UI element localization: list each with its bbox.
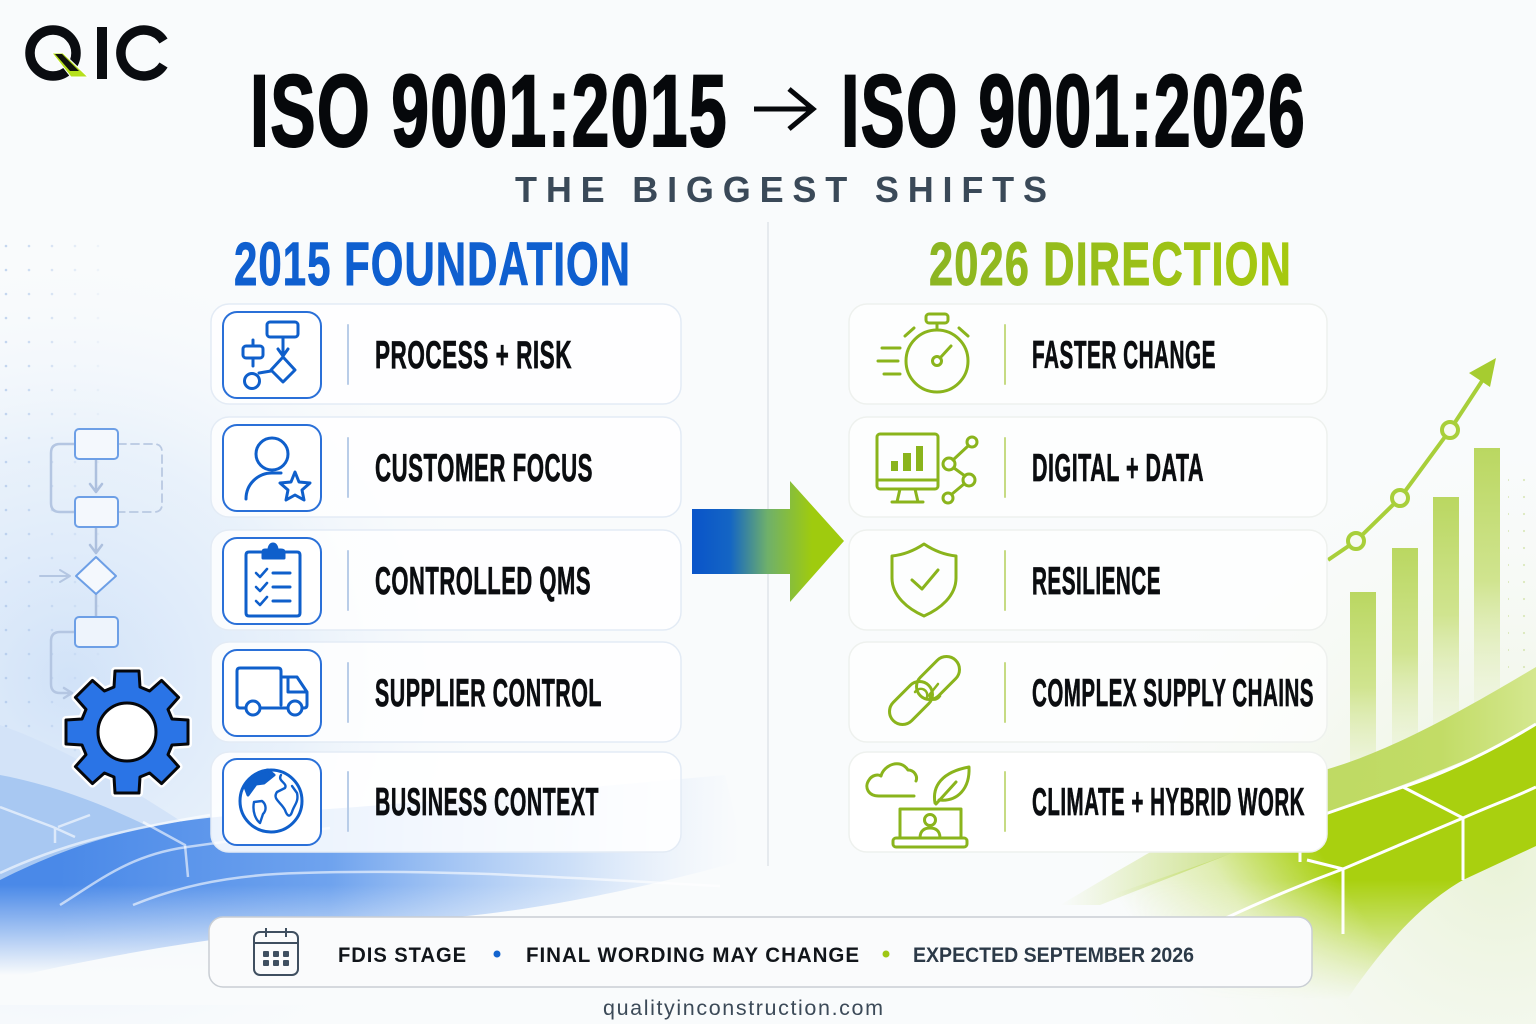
card: process + risk: PROCESS + RISK <box>375 334 572 377</box>
footer status bar: FDIS STAGE <box>338 943 467 967</box>
card: digital + data: DIGITAL + DATA <box>1032 447 1204 490</box>
footer status bar: FINAL WORDING MAY CHANGE <box>526 943 860 967</box>
card: resilience <box>849 530 1327 630</box>
process flowchart <box>40 429 162 698</box>
card: process + risk <box>211 304 681 404</box>
card: controlled qms: CONTROLLED QMS <box>375 560 591 603</box>
background <box>0 244 1536 1024</box>
footer status bar: EXPECTED SEPTEMBER 2026 <box>913 943 1194 967</box>
icon: calendar <box>254 928 298 975</box>
logo: QIC <box>30 27 164 79</box>
footer status bar <box>209 917 1312 987</box>
growth chart <box>1328 358 1500 782</box>
card: controlled qms <box>211 530 681 630</box>
card: climate + hybrid work: CLIMATE + HYBRID WORK <box>1032 781 1305 824</box>
blue wave landscape <box>0 725 760 1005</box>
card: resilience: RESILIENCE <box>1032 560 1161 603</box>
card: business context: BUSINESS CONTEXT <box>375 781 599 824</box>
arrow: 2015 to 2026 <box>692 481 844 602</box>
card: customer focus <box>211 417 681 517</box>
card: complex supply chains <box>849 642 1327 742</box>
center divider <box>767 222 769 866</box>
card: customer focus: CUSTOMER FOCUS <box>375 447 593 490</box>
subtitle: THE BIGGEST SHIFTS <box>515 169 1047 210</box>
green wave landscape <box>1073 667 1536 993</box>
card: business context <box>211 752 681 852</box>
heading: 2015 foundation: 2015 FOUNDATION <box>234 230 631 298</box>
title: ISO 9001:2015 <box>250 54 728 168</box>
panel: 2015 foundation <box>211 304 681 852</box>
card: faster change <box>849 304 1327 404</box>
card: supplier control: SUPPLIER CONTROL <box>375 672 602 715</box>
icon: gear <box>66 671 188 793</box>
card: digital + data <box>849 417 1327 517</box>
panel: 2026 direction <box>849 304 1327 852</box>
title <box>250 54 1306 168</box>
heading: 2026 direction: 2026 DIRECTION <box>929 230 1292 298</box>
website url: qualityinconstruction.com <box>603 996 883 1020</box>
card: climate + hybrid work <box>849 752 1327 852</box>
card: supplier control <box>211 642 681 742</box>
card: faster change: FASTER CHANGE <box>1032 334 1216 377</box>
